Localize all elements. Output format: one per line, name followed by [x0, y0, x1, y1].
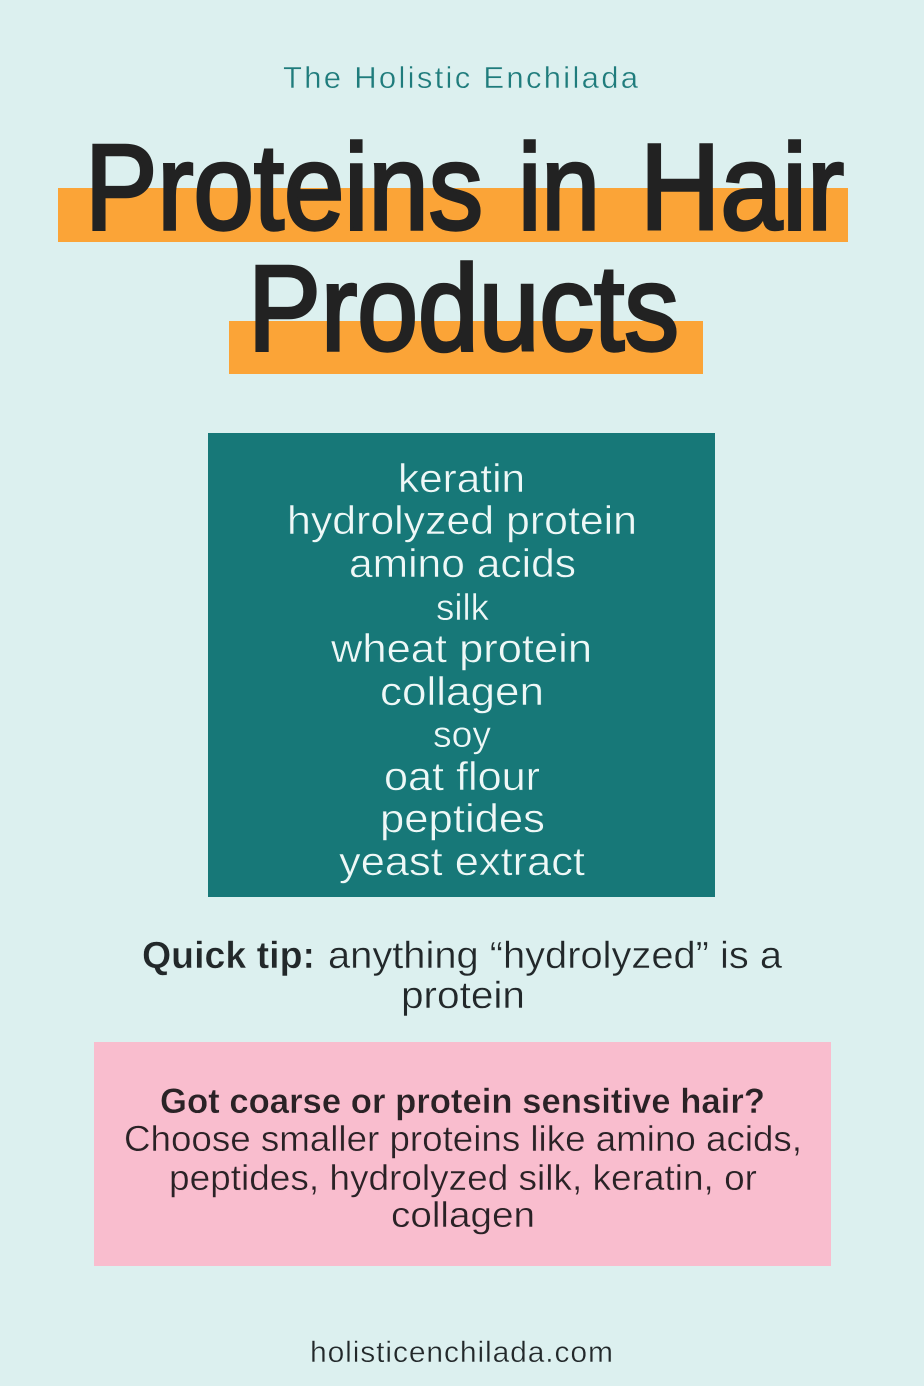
title with orange highlights: Hair: [640, 119, 844, 255]
panel: protein ingredient list: yeast extract: [339, 840, 585, 884]
panel: protein ingredient list: keratin: [398, 457, 525, 501]
brand header: The Holistic Enchilada: [283, 60, 639, 95]
panel: protein ingredient list: silk: [436, 587, 489, 628]
title with orange highlights: in: [518, 119, 600, 255]
quick tip text: protein: [401, 975, 525, 1017]
title with orange highlights: [58, 119, 848, 376]
panel: protein ingredient list: oat flour: [384, 755, 540, 799]
panel: protein ingredient list: amino acids: [349, 542, 576, 586]
title with orange highlights: Proteins: [85, 119, 483, 255]
panel: protein ingredient list: collagen: [380, 670, 544, 714]
title with orange highlights: Products: [248, 240, 679, 376]
quick tip text: anything “hydrolyzed” is a: [328, 935, 783, 977]
panel: coarse hair advice: peptides, hydrolyzed silk, keratin, or: [169, 1157, 757, 1198]
panel: coarse hair advice: collagen: [391, 1194, 535, 1235]
panel: coarse hair advice: Choose smaller proteins like amino acids,: [124, 1118, 802, 1159]
footer website: holisticenchilada.com: [310, 1336, 613, 1369]
quick tip text: [142, 935, 783, 1017]
panel: protein ingredient list: [208, 433, 715, 897]
panel: protein ingredient list: hydrolyzed protein: [287, 499, 637, 543]
panel: protein ingredient list: peptides: [380, 797, 545, 841]
panel: coarse hair advice: Got coarse or protein sensitive hair?: [160, 1082, 765, 1121]
quick tip text: Quick tip:: [142, 935, 315, 977]
panel: protein ingredient list: wheat protein: [330, 627, 592, 671]
panel: protein ingredient list: soy: [433, 714, 492, 755]
panel: coarse hair advice: [94, 1042, 831, 1266]
